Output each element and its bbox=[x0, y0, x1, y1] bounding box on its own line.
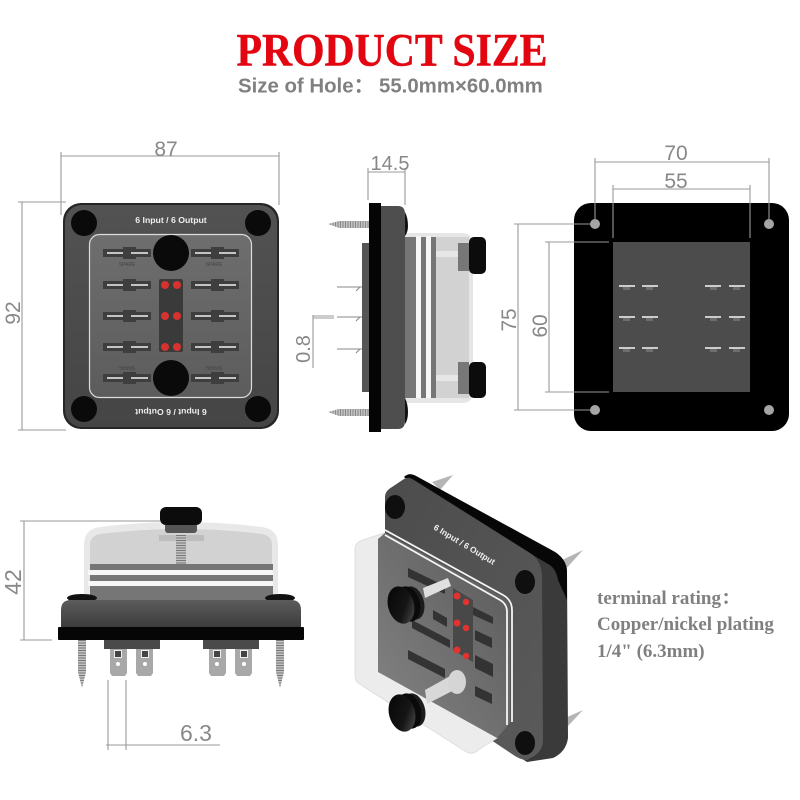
dimension: 70 bbox=[595, 142, 769, 222]
dimension: 6.3: 6.3 bbox=[180, 720, 212, 746]
panel label inverted: 6 Input / 6 Output bbox=[135, 407, 207, 417]
dimension: 0.8: 0.8 bbox=[293, 335, 315, 363]
dimension: width 87 bbox=[61, 138, 279, 215]
dimension: 60 bbox=[529, 242, 609, 392]
window with white seal bbox=[378, 533, 510, 738]
panel label: 6 Input / 6 Output bbox=[135, 215, 207, 225]
fuse window bbox=[90, 234, 252, 398]
dimension: depth 14.5 bbox=[368, 153, 409, 205]
terminal rating note: terminal rating： bbox=[597, 588, 740, 609]
gray body bbox=[381, 206, 405, 429]
black edge bbox=[404, 474, 567, 600]
side view with dimensions bbox=[293, 153, 486, 432]
gray body bbox=[61, 600, 301, 627]
mounting holes bbox=[590, 219, 774, 415]
front panel bbox=[63, 203, 279, 429]
screw tips bbox=[432, 475, 583, 726]
spare labels bbox=[118, 262, 223, 370]
dimension: 0.8 bbox=[293, 315, 334, 368]
mounting screws bbox=[328, 221, 369, 416]
dimension: 6.3 bbox=[106, 680, 220, 750]
screws bbox=[78, 640, 284, 688]
front face bbox=[385, 478, 543, 760]
spare labels: SPARE bbox=[118, 364, 135, 370]
bottom knob bbox=[385, 691, 429, 735]
terminals bbox=[619, 285, 745, 349]
screw heads bbox=[67, 594, 295, 602]
terminals bbox=[337, 287, 362, 353]
rear housing bbox=[613, 242, 750, 392]
spare labels: SPARE bbox=[205, 364, 222, 370]
transparent cover outer bbox=[355, 533, 497, 753]
subtitle: size of hole: Size of Hole： bbox=[238, 76, 374, 98]
dimension: 60: 60 bbox=[529, 314, 552, 338]
body side and plate bbox=[404, 474, 568, 762]
fuse slots bbox=[103, 247, 239, 384]
terminal rating note bbox=[597, 588, 774, 662]
spare labels: SPARE bbox=[206, 262, 223, 268]
black base plate bbox=[58, 627, 304, 640]
knob posts bbox=[423, 578, 466, 704]
subtitle: size of hole bbox=[238, 76, 543, 98]
knobs bbox=[153, 235, 189, 396]
black base plate bbox=[369, 203, 381, 432]
spare labels: SPARE bbox=[119, 262, 136, 268]
subtitle: size of hole: 55.0mm×60.0mm bbox=[379, 76, 543, 98]
white seal lines bbox=[385, 530, 512, 725]
dimension: 42 bbox=[0, 521, 160, 640]
dimension: 75: 75 bbox=[498, 308, 521, 332]
terminal windows bbox=[114, 650, 248, 658]
screw holes bbox=[71, 210, 271, 422]
dimension: 55 bbox=[613, 170, 750, 238]
terminal blocks bbox=[104, 640, 259, 649]
angled label: 6 Input / 6 Output bbox=[432, 522, 497, 567]
isometric view bbox=[355, 474, 583, 762]
fuse slots bbox=[408, 568, 493, 704]
transparent cover bbox=[405, 233, 473, 403]
bottom side view with dimensions bbox=[0, 507, 304, 750]
rear view with dimensions bbox=[498, 142, 789, 431]
knobs bbox=[469, 237, 486, 398]
dimension: 75 bbox=[498, 224, 590, 410]
rear housing bbox=[362, 243, 369, 392]
terminal rating note: 1/4" (6.3mm) bbox=[597, 641, 705, 662]
title: PRODUCT SIZE bbox=[236, 26, 548, 76]
corner screw holes bbox=[385, 495, 535, 755]
front view with dimensions bbox=[2, 138, 279, 430]
dimension: 55: 55 bbox=[664, 170, 688, 193]
spade terminals bbox=[110, 649, 252, 676]
dimension: 70: 70 bbox=[664, 142, 688, 165]
terminal holes bbox=[116, 662, 246, 666]
dimension: 42: 42 bbox=[0, 569, 26, 595]
rear plate bbox=[574, 203, 789, 431]
LEDs bbox=[453, 588, 473, 662]
dimension: height 92: 92 bbox=[2, 301, 25, 325]
LED panel bbox=[159, 279, 183, 352]
dimension: height 92 bbox=[2, 202, 66, 430]
top knob bbox=[384, 583, 428, 627]
top knob bbox=[160, 507, 202, 533]
dimension: width 87: 87 bbox=[154, 138, 178, 161]
terminal rating note: Copper/nickel plating bbox=[597, 614, 774, 635]
transparent cover bbox=[84, 522, 278, 600]
dimension: depth 14.5: 14.5 bbox=[371, 153, 409, 175]
